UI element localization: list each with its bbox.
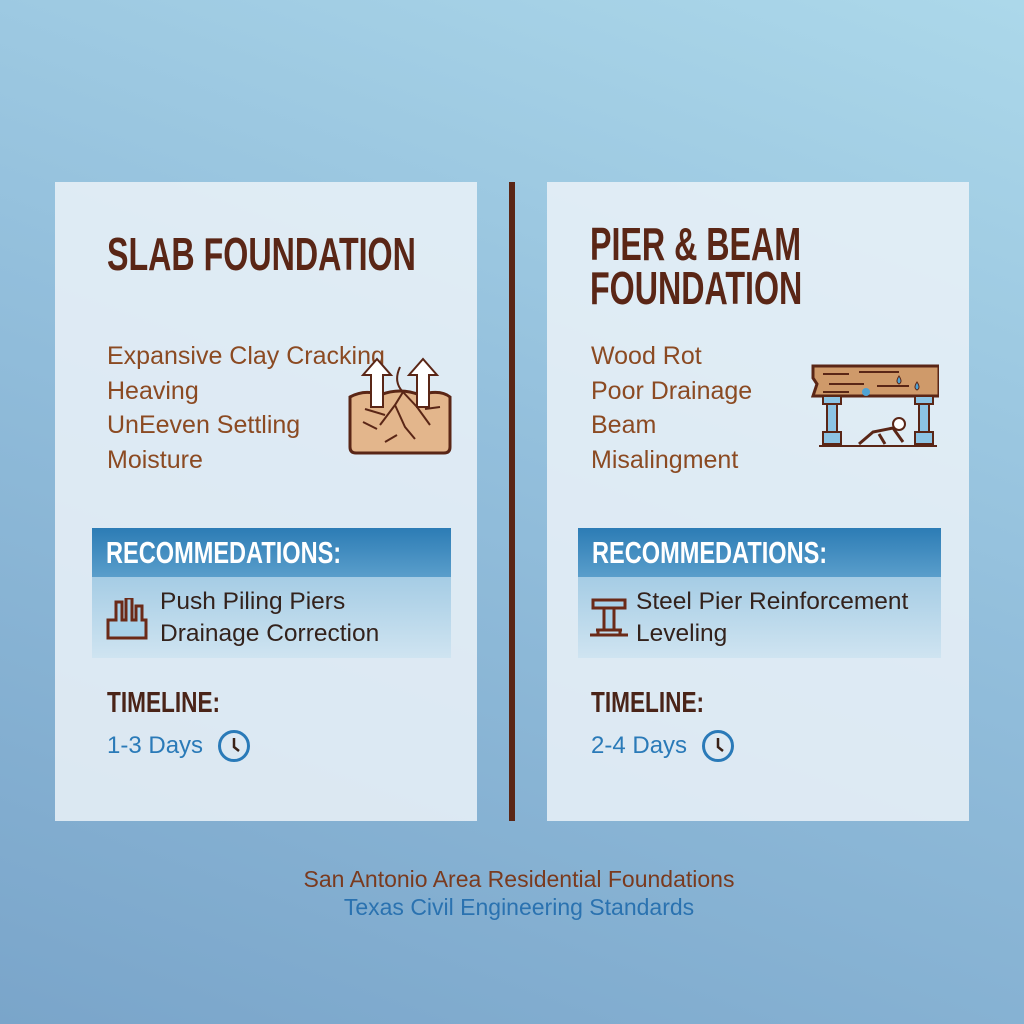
text block: slab issues: UnEeven Settling <box>107 411 300 439</box>
recommendations box: pier <box>578 528 941 658</box>
footer text: Texas Civil Engineering Standards <box>344 894 694 920</box>
recommendations box: pier: Steel Pier Reinforcement <box>636 588 908 615</box>
icon: push piers <box>106 598 148 640</box>
text block: pier issues <box>591 342 752 474</box>
heading: pier & beam: PIER & BEAM <box>590 218 801 270</box>
text block: pier issues: Wood Rot <box>591 342 702 370</box>
panel: pier and beam: 2-4 Days <box>591 732 687 759</box>
panel: slab foundation: 1-3 Days <box>107 732 203 759</box>
icon: cracked clay <box>348 358 452 454</box>
icon: rotted beam <box>810 364 939 447</box>
heading: pier & beam <box>590 218 802 314</box>
icon: steel pier <box>590 598 628 636</box>
divider <box>509 182 515 821</box>
timeline: slab: TIMELINE: <box>107 687 220 719</box>
timeline: pier: TIMELINE: <box>591 687 704 719</box>
text block: slab issues: Expansive Clay Cracking <box>107 342 385 370</box>
recommendations box: pier: Leveling <box>636 620 727 647</box>
footer text <box>304 866 734 920</box>
text block: pier issues: Poor Drainage <box>591 376 752 404</box>
text block: pier issues: Misalingment <box>591 446 738 474</box>
text block: slab issues: Moisture <box>107 446 203 474</box>
panel: slab foundation <box>55 182 477 821</box>
recommendations box: slab: Drainage Correction <box>160 620 379 647</box>
text block: pier issues: Beam <box>591 411 656 439</box>
recommendations box: slab: RECOMMEDATIONS: <box>106 535 341 570</box>
footer text: San Antonio Area Residential Foundations <box>304 866 734 892</box>
heading: pier & beam: FOUNDATION <box>590 262 802 314</box>
recommendations box: slab: Push Piling Piers <box>160 588 345 615</box>
text block: slab issues: Heaving <box>107 376 199 404</box>
recommendations box: slab <box>92 528 451 658</box>
heading: slab: SLAB FOUNDATION <box>107 228 416 280</box>
panel: pier and beam <box>547 182 969 821</box>
text block: slab issues <box>107 342 385 474</box>
recommendations box: pier: RECOMMEDATIONS: <box>592 535 827 570</box>
